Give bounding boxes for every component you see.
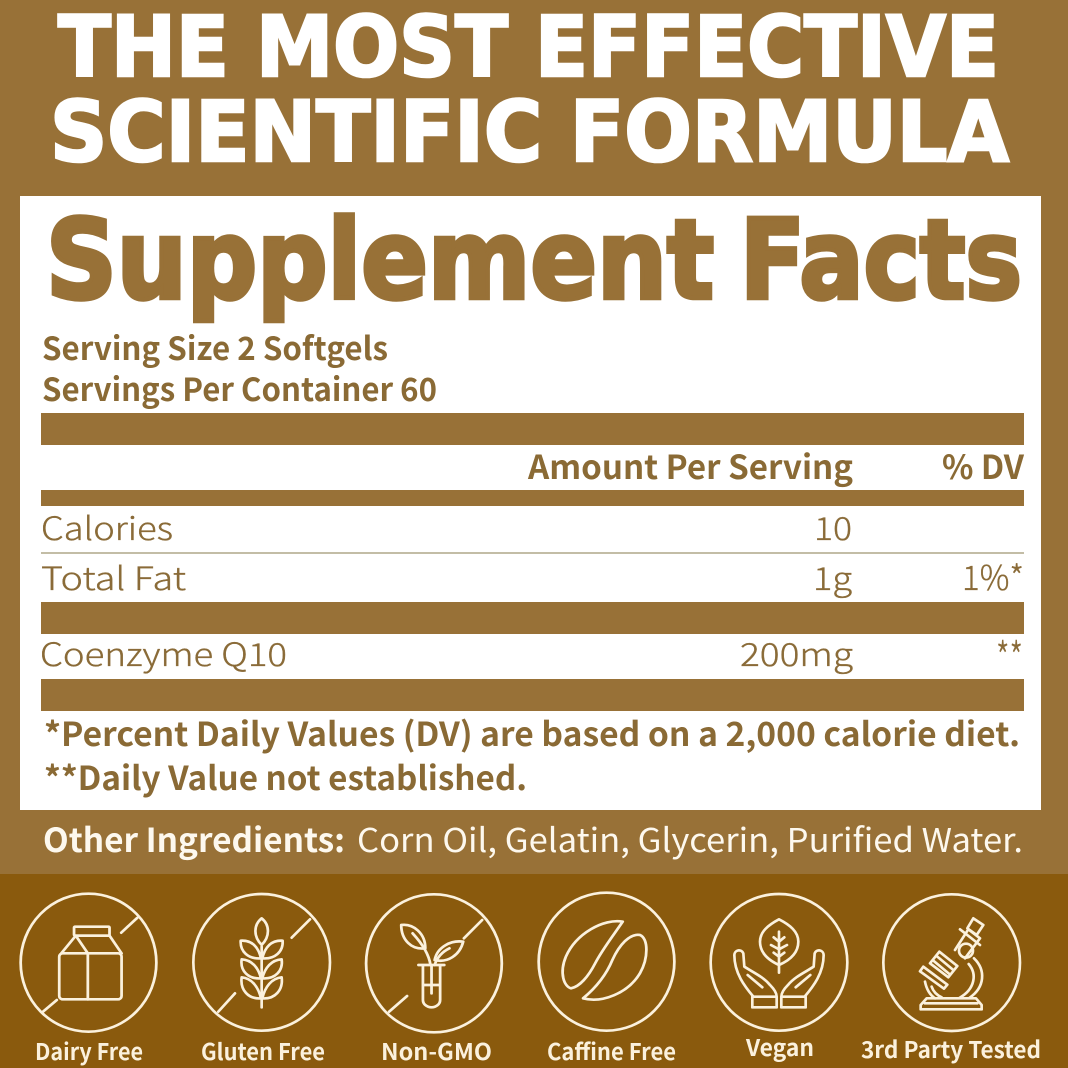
other ingredients: Corn Oil, Gelatin, Glycerin, Purified Water. [357,814,1023,862]
icon labels: Gluten Free [201,1033,325,1067]
icon band [0,874,1068,1068]
row: total fat: 1g [813,554,852,600]
icon labels: Vegan [745,1029,814,1063]
serving information [42,324,437,411]
footnotes: *Percent Daily Values (DV) are based on a 2,000 calorie diet. [44,708,1020,756]
icon: non-gmo [366,894,502,1032]
serving information: Serving Size 2 Softgels [42,324,388,370]
row: calories: 10 [814,504,852,550]
row: coenzyme q10: ** [996,625,1023,686]
panel: supplement facts [20,196,1041,810]
icon: third party tested microscope [883,894,1020,1031]
icon labels: 3rd Party Tested [861,1031,1041,1065]
row: total fat [41,551,1024,600]
table header: % DV [942,441,1025,489]
icon labels: Non-GMO [381,1033,492,1067]
row: total fat: 1%* [962,551,1024,600]
icon labels: Dairy Free [35,1033,143,1067]
icon labels [35,1029,1041,1067]
title [50,0,1009,181]
serving information: Servings Per Container 60 [42,365,437,411]
other ingredients [43,814,1023,862]
row: total fat: Total Fat [41,554,186,600]
other ingredients: Other Ingredients: [43,814,345,862]
table header [527,441,1025,489]
heading: supplement facts: Facts [740,196,1022,324]
title: THE MOST EFFECTIVE [58,0,999,96]
heading: supplement facts: Supplement [46,196,714,324]
footnotes: **Daily Value not established. [44,752,527,800]
footnotes [44,708,1020,800]
table bars [41,413,1024,711]
row: calories [41,504,852,550]
icon labels: Caffine Free [547,1033,676,1067]
row: calories: Calories [41,504,173,550]
icon: vegan [711,894,847,1031]
row: coenzyme q10: 200mg [740,630,853,676]
title: SCIENTIFIC FORMULA [50,83,1009,181]
icon: gluten free [193,894,330,1031]
row: coenzyme q10: Coenzyme Q10 [40,630,287,676]
icon: caffeine free [539,893,674,1031]
icon: dairy free [21,894,156,1032]
row: coenzyme q10 [40,625,1023,686]
table header: Amount Per Serving [527,441,853,489]
